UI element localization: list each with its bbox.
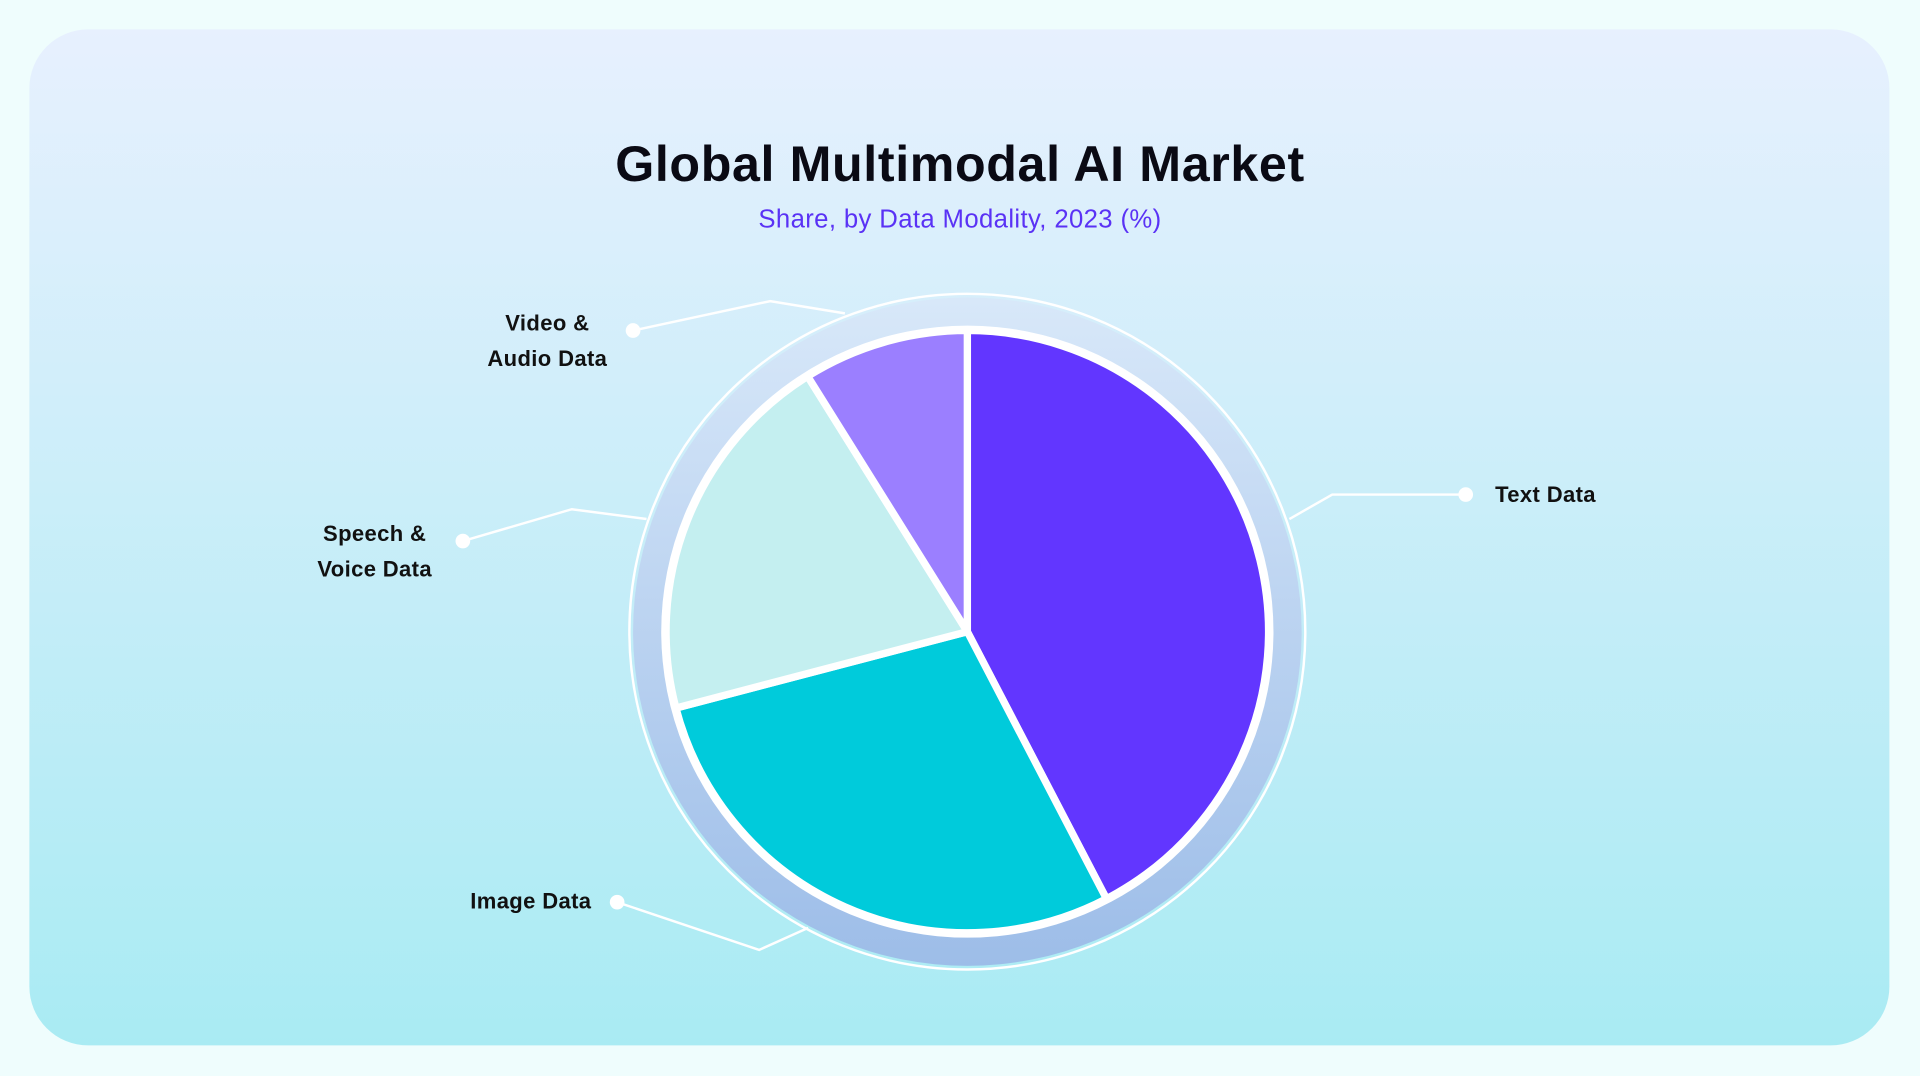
slice: Video & Audio Data	[808, 331, 967, 632]
slice: Speech & Voice Data	[666, 376, 967, 708]
callout: Image Data: Image Data	[470, 888, 592, 913]
callout: Video & Audio Data	[487, 301, 845, 371]
slice: Image Data	[676, 632, 1106, 933]
subtitle: Share, by Data Modality, 2023 (%)	[758, 206, 1162, 234]
callout: Video & Audio Data: Video &	[505, 311, 589, 336]
callout: Video & Audio Data: Audio Data	[487, 346, 608, 371]
pie chart	[629, 294, 1305, 970]
callout: Text Data	[1289, 482, 1596, 519]
callout: Text Data: Text Data	[1495, 482, 1596, 507]
callout: Speech & Voice Data	[317, 509, 647, 582]
callout: Speech & Voice Data: Voice Data	[317, 557, 432, 582]
title: Global Multimodal AI Market	[615, 136, 1305, 192]
callout: Image Data	[470, 888, 808, 950]
callout: Speech & Voice Data: Speech &	[323, 521, 426, 546]
slice: Text Data	[967, 331, 1269, 899]
